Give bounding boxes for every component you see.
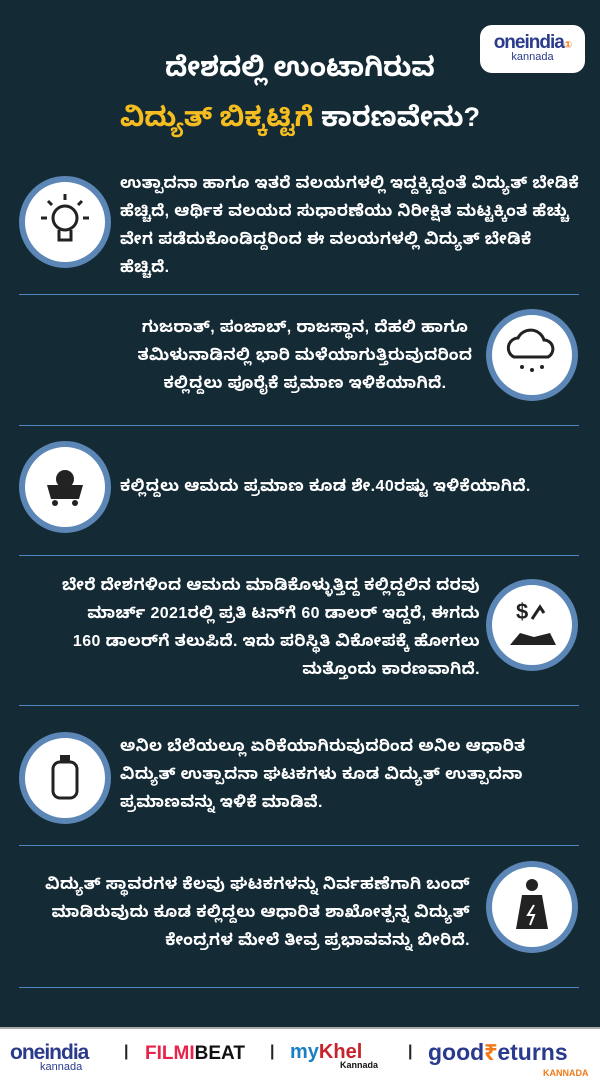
logo: kannada: [511, 51, 554, 63]
panel: gas: ಅನಿಲ ಬೆಲೆಯಲ್ಲೂ ಏರಿಕೆಯಾಗಿರುವುದರಿಂದ ಅನಿಲ ಆಧಾರಿತ ವಿದ್ಯುತ್ ಉತ್ಪಾದನಾ ಘಟಕಗಳು ಕೂಡ ವಿದ್ಯುತ್ ಉತ್ಪಾದನಾ ಪ್ರಮಾಣವನ್ನು ಇಳಿಕೆ ಮಾಡಿವೆ.: [120, 738, 526, 811]
title: ವಿದ್ಯುತ್ ಬಿಕ್ಕಟ್ಟಿಗೆ ಕಾರಣವೇನು?: [120, 102, 480, 132]
panel: maintenance: [45, 861, 578, 953]
logo: oneindia①: [494, 32, 571, 53]
icon: coal price: $: [516, 599, 528, 624]
logo: [480, 25, 585, 73]
icon: coal cart: [19, 441, 111, 533]
text: ಉತ್ಪಾದನಾ ಹಾಗೂ ಇತರೆ ವಲಯಗಳಲ್ಲಿ ಇದ್ದಕ್ಕಿದ್ದಂತೆ ವಿದ್ಯುತ್ ಬೇಡಿಕೆ ಹೆಚ್ಚಿದೆ, ಆರ್ಥಿಕ ವಲಯದ ಸುಧಾರಣೆಯು ನಿರೀಕ್ಷಿತ ಮಟ್ಟಕ್ಕಿಂತ ಹೆಚ್ಚು ವೇಗ ಪಡೆದುಕೊಂಡಿದ್ದರಿಂದ ಈ ವಲಯಗಳಲ್ಲಿ ವಿದ್ಯುತ್ ಬೇಡಿಕೆ ಹೆಚ್ಚಿದೆ.: [120, 175, 579, 276]
panel: rain: ಗುಜರಾತ್, ಪಂಜಾಬ್, ರಾಜಸ್ಥಾನ, ದೆಹಲಿ ಹಾಗೂ ತಮಿಳುನಾಡಿನಲ್ಲಿ ಭಾರಿ ಮಳೆಯಾಗುತ್ತಿರುವುದರಿಂದ ಕಲ್ಲಿದ್ದಲು ಪೂರೈಕೆ ಪ್ರಮಾಣ ಇಳಿಕೆಯಾಗಿದೆ.: [138, 319, 472, 392]
footer: FILMIBEAT: [145, 1043, 245, 1064]
icon: gas cylinder: [19, 732, 111, 824]
title: ದೇಶದಲ್ಲಿ ಉಂಟಾಗಿರುವ: [165, 52, 435, 82]
footer: good₹eturns: [428, 1039, 568, 1065]
icon: rain cloud: [486, 309, 578, 401]
footer: |: [408, 1043, 412, 1060]
panel: price: ಬೇರೆ ದೇಶಗಳಿಂದ ಆಮದು ಮಾಡಿಕೊಳ್ಳುತ್ತಿದ್ದ ಕಲ್ಲಿದ್ದಲಿನ ದರವು ಮಾರ್ಚ್ 2021ರಲ್ಲಿ ಪ್ರತಿ ಟನ್‌ಗೆ 60 ಡಾಲರ್ ಇದ್ದರೆ, ಈಗದು 160 ಡಾಲರ್‌ಗೆ ತಲುಪಿದೆ. ಇದು ಪರಿಸ್ಥಿತಿ ವಿಕೋಪಕ್ಕೆ ಹೋಗಲು ಮತ್ತೊಂದು ಕಾರಣವಾಗಿದೆ.: [62, 577, 480, 678]
footer: |: [124, 1043, 128, 1060]
panel: demand: [19, 175, 579, 278]
icon: coal price: [486, 579, 578, 671]
panel: rain: [138, 309, 578, 401]
icon: power plant: [486, 861, 578, 953]
icon: bulb: [19, 176, 111, 268]
footer: myKhel: [290, 1041, 362, 1063]
footer: KANNADA: [543, 1068, 588, 1078]
footer: oneindia: [10, 1041, 88, 1064]
footer: Kannada: [340, 1060, 378, 1070]
panel: coal import: ಕಲ್ಲಿದ್ದಲು ಆಮದು ಪ್ರಮಾಣ ಕೂಡ ಶೇ.40ರಷ್ಟು ಇಳಿಕೆಯಾಗಿದೆ.: [120, 478, 531, 495]
panel: maintenance: ವಿದ್ಯುತ್ ಸ್ಥಾವರಗಳ ಕೆಲವು ಘಟಕಗಳನ್ನು ನಿರ್ವಹಣೆಗಾಗಿ ಬಂದ್ ಮಾಡಿರುವುದು ಕೂಡ ಕಲ್ಲಿದ್ದಲು ಆಧಾರಿತ ಶಾಖೋತ್ಪನ್ನ ವಿದ್ಯುತ್ ಕೇಂದ್ರಗಳ ಮೇಲೆ ತೀವ್ರ ಪ್ರಭಾವವನ್ನು ಬೀರಿದೆ.: [45, 876, 470, 949]
footer: [0, 1027, 600, 1082]
title: [120, 52, 480, 138]
panel: gas: [19, 732, 526, 824]
footer: |: [270, 1043, 274, 1060]
footer: kannada: [40, 1061, 82, 1073]
panel: coal import: [19, 441, 531, 533]
